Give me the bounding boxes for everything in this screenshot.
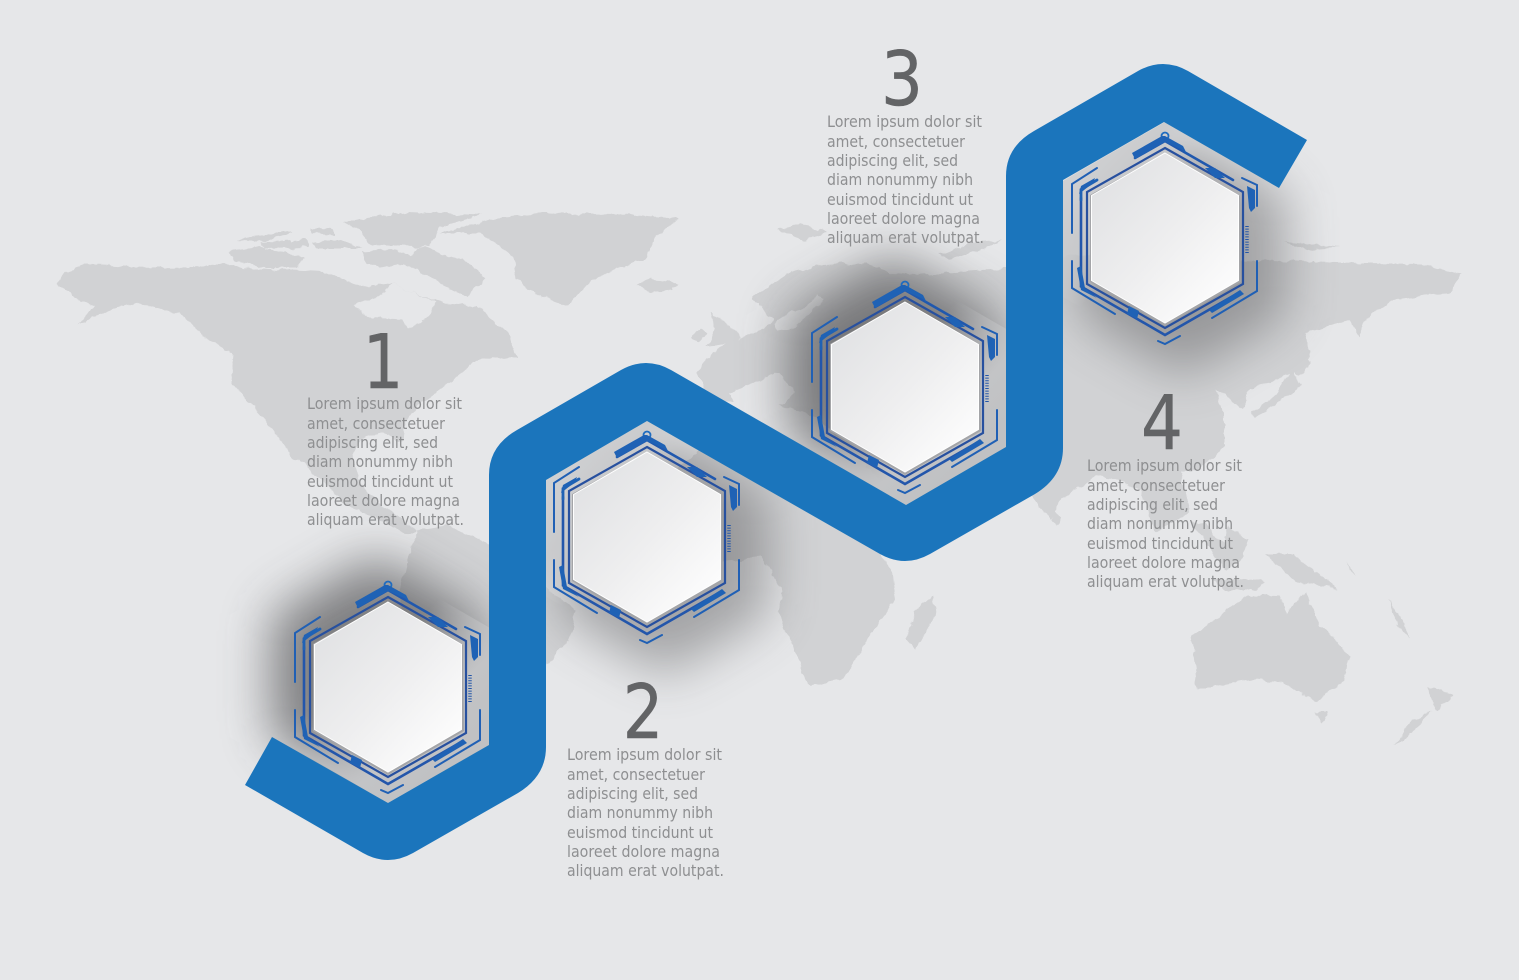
text block 3: laoreet dolore magna [827, 209, 980, 228]
world map [57, 212, 1462, 800]
map: Greenland [439, 213, 680, 305]
text block 3: amet, consectetuer [827, 132, 965, 151]
text block 1: euismod tincidunt ut [307, 472, 453, 491]
map: water cutouts [352, 283, 824, 425]
hexagon 2 [554, 432, 739, 643]
number 3: 3 [881, 35, 923, 123]
text block 2: Lorem ipsum dolor sit [567, 745, 722, 764]
blue ribbon [245, 64, 1307, 860]
hexagon 1 [295, 582, 480, 793]
text block 3: diam nonummy nibh [827, 170, 973, 189]
text block 1 [307, 394, 464, 529]
shadows: hexagons 2 and 4 [561, 136, 1287, 675]
map: Japan [1252, 352, 1312, 418]
shadows: hexagons 1 and 3 [272, 256, 997, 796]
text block 4 [1087, 456, 1244, 591]
map: Australia [1192, 591, 1350, 702]
text block 4: euismod tincidunt ut [1087, 534, 1233, 553]
text block 4: aliquam erat volutpat. [1087, 572, 1244, 591]
plate: hexagon 4 [1063, 122, 1267, 356]
text block 4: adipiscing elit, sed [1087, 495, 1218, 514]
map: Eurasia [697, 255, 1462, 532]
text block 2 [567, 745, 724, 880]
text block 4: amet, consectetuer [1087, 476, 1225, 495]
plate: hexagon 3 [804, 271, 1008, 505]
map: Sri Lanka [1051, 510, 1060, 526]
text block 3: Lorem ipsum dolor sit [827, 112, 982, 131]
text block 2: euismod tincidunt ut [567, 823, 713, 842]
map: Southeast Asia islands [1190, 520, 1408, 640]
text block 1: Lorem ipsum dolor sit [307, 394, 462, 413]
number 1: 1 [363, 319, 403, 406]
map: Tasmania [1313, 711, 1329, 724]
text block 4: Lorem ipsum dolor sit [1087, 456, 1242, 475]
plate: hexagon 2 [545, 421, 749, 655]
map: Svalbard and Arctic Russia [778, 224, 1340, 260]
map: South America [400, 525, 575, 800]
number 4: 4 [1141, 379, 1183, 467]
text block 3: aliquam erat volutpat. [827, 228, 984, 247]
text block 4: laoreet dolore magna [1087, 553, 1240, 572]
text block 2: laoreet dolore magna [567, 842, 720, 861]
text block 2: diam nonummy nibh [567, 803, 713, 822]
text block 1: aliquam erat volutpat. [307, 510, 464, 529]
text block 2: amet, consectetuer [567, 765, 705, 784]
map: UK and Ireland [692, 312, 740, 347]
text block 1: diam nonummy nibh [307, 452, 453, 471]
number 2: 2 [623, 669, 663, 756]
text block 3: adipiscing elit, sed [827, 151, 958, 170]
text block 2: aliquam erat volutpat. [567, 861, 724, 880]
text block 4: diam nonummy nibh [1087, 514, 1233, 533]
map: New Zealand [1394, 686, 1453, 746]
text block 1: adipiscing elit, sed [307, 433, 438, 452]
map: arctic islands [228, 212, 485, 297]
text block 3: euismod tincidunt ut [827, 190, 973, 209]
plate: hexagon 1 [286, 569, 490, 803]
map: North America [57, 262, 517, 535]
map: Madagascar [907, 596, 936, 650]
text block 3 [827, 112, 984, 247]
text block 1: amet, consectetuer [307, 414, 445, 433]
text block 2: adipiscing elit, sed [567, 784, 698, 803]
map: Iceland [636, 280, 678, 292]
hexagon 4 [1072, 132, 1257, 344]
map: Africa [640, 430, 895, 686]
hexagon 3 [812, 282, 997, 493]
text block 1: laoreet dolore magna [307, 491, 460, 510]
